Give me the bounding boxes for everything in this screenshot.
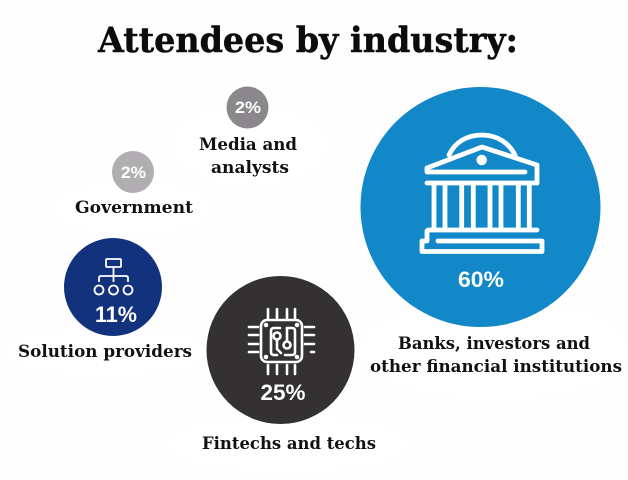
value: 25%: 25% — [260, 380, 306, 405]
label: solution providers: Solution providers — [18, 342, 192, 362]
value: media 2%: 2% — [235, 98, 261, 117]
panel: banks 60% — [360, 87, 622, 377]
circle: banks — [360, 87, 600, 327]
icon: microchip — [249, 309, 314, 374]
label: government: Government — [75, 198, 193, 218]
panel: media 2% — [199, 86, 297, 178]
circle: solution providers — [64, 238, 162, 336]
circle: media — [226, 86, 268, 128]
value: government 2%: 2% — [121, 163, 146, 182]
icon: org chart — [94, 259, 132, 294]
label: banks: other financial institutions — [370, 357, 622, 377]
icon: bank building — [422, 135, 542, 252]
circle: fintechs — [206, 276, 354, 424]
value: 11%: 11% — [95, 302, 137, 327]
label: media: Media and — [199, 135, 297, 155]
label: fintechs: Fintechs and techs — [202, 434, 376, 454]
panel: fintechs 25% — [202, 276, 376, 454]
panel: solution providers 11% — [18, 238, 192, 362]
label: media: analysts — [211, 158, 289, 178]
circle: government — [112, 151, 154, 193]
value: 60%: 60% — [458, 267, 504, 292]
title: Attendees by industry: — [97, 20, 518, 61]
label: banks: Banks, investors and — [398, 334, 590, 354]
panel: government 2% — [75, 151, 193, 218]
